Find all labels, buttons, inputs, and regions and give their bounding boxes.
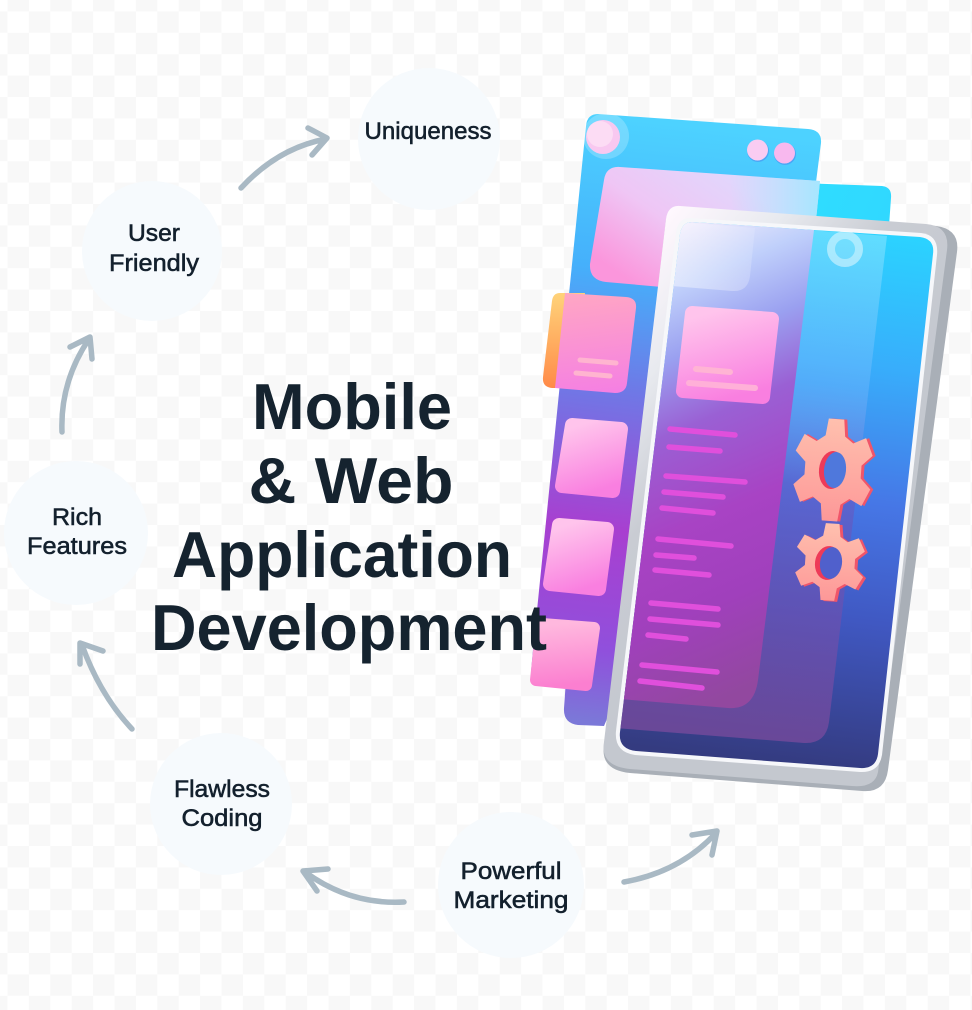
title: & Web [248,444,454,517]
phone inner white rim [616,218,937,772]
phone casing [604,206,947,786]
window corner bubble [583,113,629,159]
arrow: user friendly to uniqueness [241,128,327,188]
arrow: powerful marketing to flawless coding [303,869,404,902]
circle: Powerful Marketing [438,812,584,958]
circle: Flawless Coding [150,733,292,875]
camera ring [827,231,863,267]
large hero card [590,167,820,295]
arrow: flawless coding to rich features [80,643,132,729]
arrow: rich features to user friendly [62,337,92,432]
window control dots [747,140,796,165]
icon: large gear [791,416,878,524]
illustration: app window and phone [531,113,957,791]
title [151,370,547,664]
arrow: powerful marketing to app illustration [624,831,717,882]
hero card reflection [672,222,755,291]
orange card tab [543,293,585,388]
title: Application [172,518,512,591]
back window body [531,114,821,726]
left card 1 [555,293,636,393]
circle: Flawless Coding: Flawless [174,776,270,803]
translucent outer panel [615,220,887,743]
circle: Powerful Marketing: Marketing [454,887,568,914]
phone screen [620,222,933,768]
circle: Powerful Marketing: Powerful [460,858,562,885]
screen card [683,313,772,397]
circle: Rich Features [4,461,148,605]
screen panels [615,220,887,743]
inner purple content panel [620,220,814,708]
circle: Flawless Coding: Coding [182,805,262,832]
circle: User Friendly: User [128,220,180,247]
circle: Uniqueness: Uniqueness [364,118,492,145]
circle: Uniqueness [358,68,500,210]
screen text lines [640,429,745,688]
circle: Rich Features: Features [27,533,127,560]
left card 3 [550,525,607,589]
phone casing shadow side [604,207,957,791]
icon: small gear [793,521,870,604]
back window panel [800,183,891,240]
left card 4 [536,624,594,685]
circle: Rich Features: Rich [52,504,102,531]
title: Mobile [252,370,452,443]
circle: User Friendly [82,181,222,321]
left card 2 [562,425,621,491]
circle: User Friendly: Friendly [109,250,199,277]
title: Development [151,591,547,664]
